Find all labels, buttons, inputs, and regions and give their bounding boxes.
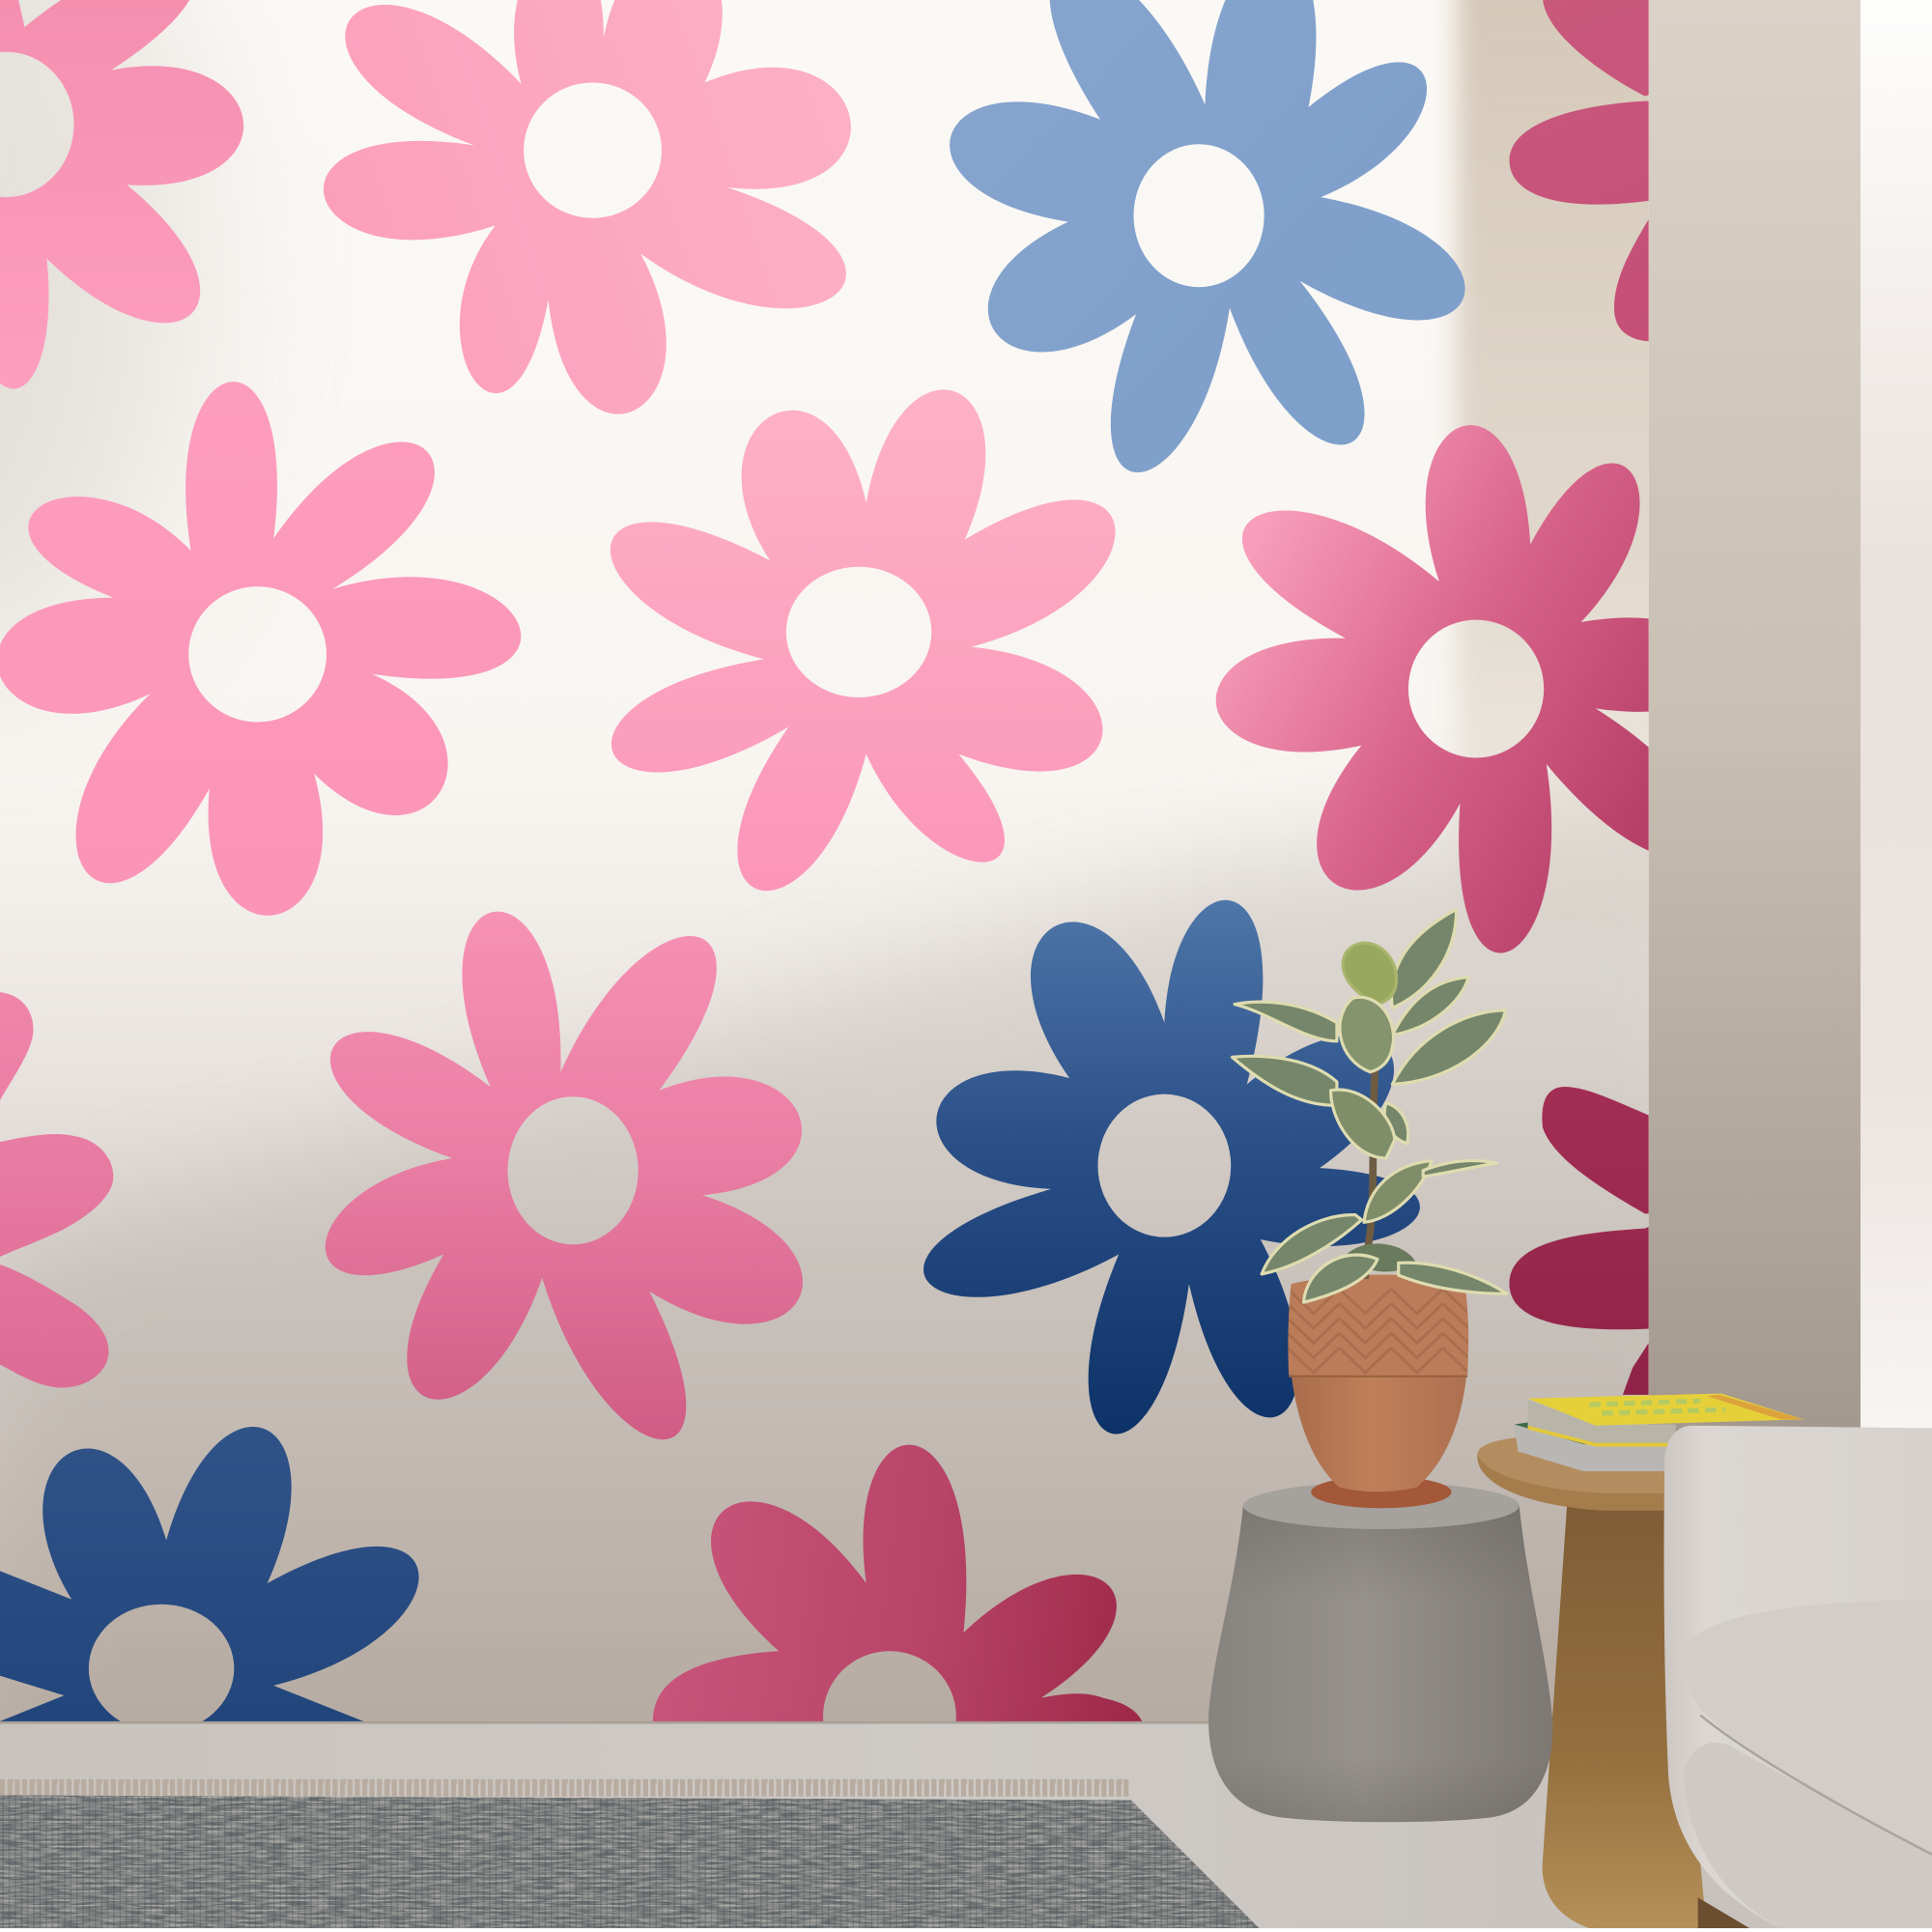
flower: top centre pink (324, 0, 851, 414)
rubber plant (1233, 909, 1507, 1302)
saucer (1311, 1476, 1452, 1508)
flower: lower right navy (923, 900, 1420, 1435)
seat cushion (1685, 1600, 1932, 1855)
wooden foot (1698, 1897, 1749, 1928)
floor (0, 1722, 1932, 1928)
stool top (1243, 1482, 1520, 1529)
far right bright wall strip (1861, 0, 1932, 1441)
table leg (1543, 1501, 1707, 1928)
flower: left edge pink (0, 992, 113, 1388)
stack of books (1515, 1394, 1804, 1471)
flower: right pink to magenta (1215, 425, 1649, 953)
rug (0, 1781, 1269, 1928)
flower: top light blue (950, 0, 1465, 472)
stem (1365, 1069, 1375, 1279)
chevron band (1288, 1276, 1468, 1375)
chair arm (1664, 1426, 1932, 1928)
pot body (1289, 1275, 1468, 1492)
rug body (0, 1795, 1260, 1928)
stool body (1208, 1506, 1552, 1822)
flower: bottom centre magenta (653, 1445, 1144, 1725)
flower: left pink (0, 382, 521, 916)
flower: centre pink (611, 389, 1116, 891)
chair base front (1683, 1743, 1932, 1928)
leaves (1233, 909, 1507, 1302)
bottom white edge (0, 1928, 1932, 1932)
concrete stool (1208, 1482, 1552, 1822)
terracotta pot (1288, 1275, 1468, 1508)
upper book pages (1528, 1400, 1676, 1444)
table top (1477, 1436, 1700, 1511)
flower: bottom-left navy (0, 1427, 419, 1725)
side table (1477, 1436, 1707, 1928)
armchair (1664, 1426, 1932, 1928)
flower: top-left pink (0, 0, 243, 388)
skirting line (0, 1721, 1213, 1723)
rug texture (0, 1795, 1269, 1928)
yellow cover (1528, 1394, 1804, 1426)
flower: top-right magenta cut by corner (1509, 0, 1658, 341)
lower book (1515, 1424, 1676, 1471)
flower: centre lower pink (326, 912, 803, 1439)
flower: right edge magenta (1509, 1087, 1658, 1395)
side wall panel (1649, 0, 1861, 1441)
rug fringe (0, 1781, 1131, 1788)
flower mural (0, 0, 1723, 1725)
